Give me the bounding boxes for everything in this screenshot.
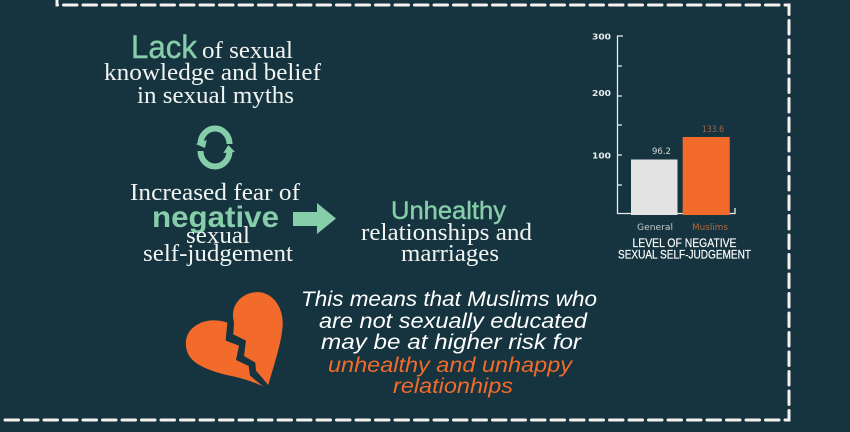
text: of sexual: of sexual (202, 38, 293, 64)
text block: conclusion (301, 288, 597, 398)
axis label: 300: 300 (592, 32, 611, 42)
text block: unhealthy relationships (361, 197, 532, 267)
text: this means that muslims who: This means that Muslims who (301, 288, 597, 311)
bar chart (592, 32, 752, 262)
axis label: 200: 200 (592, 89, 611, 98)
chart caption (618, 236, 752, 262)
text: relationships and: relationships and (361, 220, 532, 246)
value: 96.2: 96.2 (652, 147, 671, 157)
chart axes (618, 36, 735, 214)
text: sexual: sexual (186, 223, 250, 249)
text: increased fear of: Increased fear of (130, 180, 300, 206)
text: may be at higher risk for: may be at higher risk for (321, 331, 582, 354)
chart caption: SEXUAL SELF-JUDGEMENT (618, 248, 752, 262)
text block: increased fear (130, 180, 300, 267)
icon: broken heart (186, 292, 283, 387)
text: relationhips: relationhips (393, 375, 514, 398)
text: unhealthy and unhappy: unhealthy and unhappy (328, 354, 574, 377)
text: knowledge and belief: knowledge and belief (104, 60, 321, 86)
category: muslims: Muslims (692, 223, 729, 233)
chart caption: LEVEL OF NEGATIVE (632, 236, 736, 250)
arrow: right (293, 203, 336, 234)
heading: negative: negative (152, 201, 279, 234)
text: marriages: marriages (401, 241, 499, 267)
text: are not sexually educated: are not sexually educated (319, 310, 588, 333)
axis label: 100: 100 (592, 152, 611, 160)
text: self-judgement: self-judgement (143, 241, 293, 267)
heading: unhealthy: Unhealthy (391, 197, 507, 225)
heading: Lack: Lack (131, 29, 198, 65)
category: general: General (637, 223, 673, 233)
value: 133.6: 133.6 (702, 125, 724, 135)
icon: circular arrows (196, 128, 235, 166)
text block: lack of knowledge (104, 29, 321, 109)
bar: general (631, 160, 678, 215)
text: in sexual myths: in sexual myths (137, 83, 294, 109)
bar: muslims (683, 137, 730, 215)
